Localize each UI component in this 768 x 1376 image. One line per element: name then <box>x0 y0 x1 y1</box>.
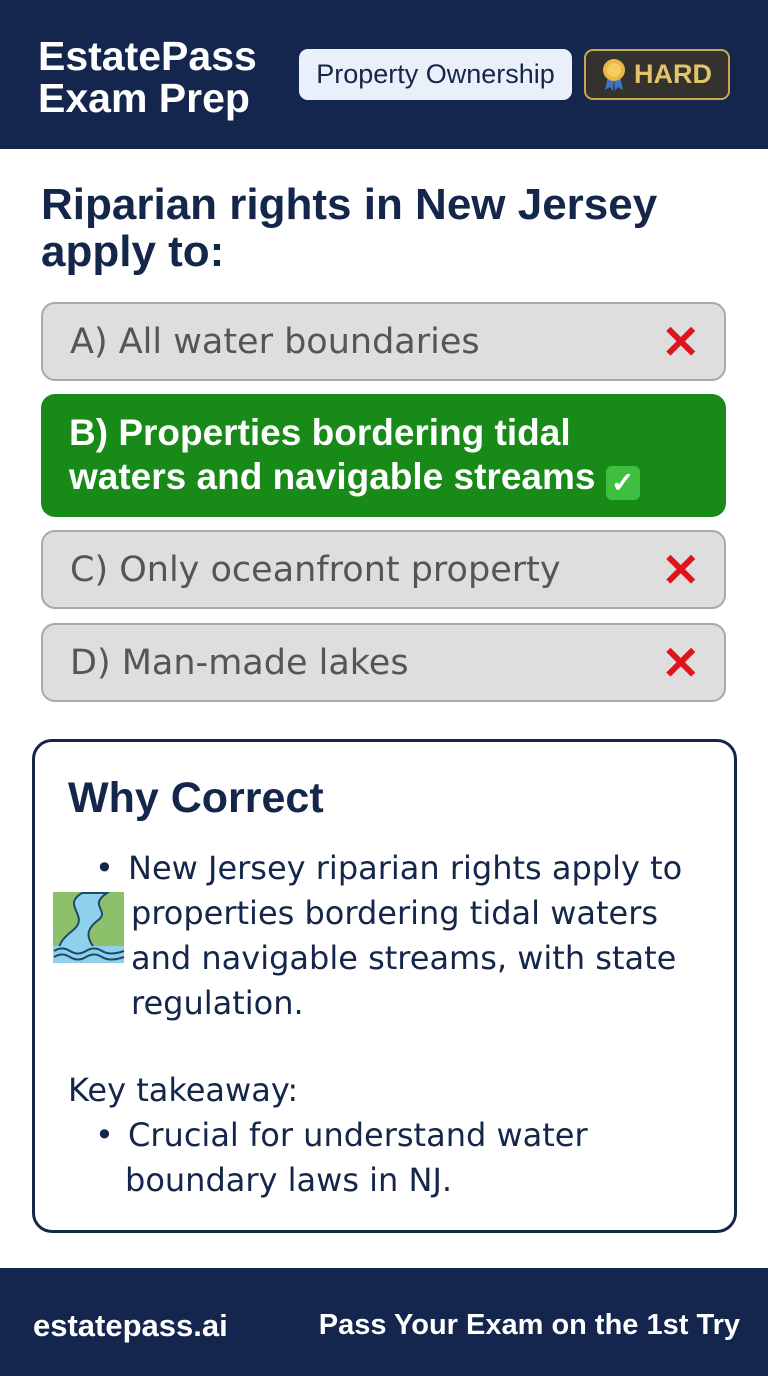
key takeaway <box>68 1071 588 1199</box>
footer <box>0 1268 768 1376</box>
explanation text: properties bordering tidal waters <box>131 894 658 932</box>
category pill <box>299 49 572 100</box>
question <box>41 180 657 276</box>
difficulty badge: HARD <box>634 59 712 89</box>
option B correct: ✓ <box>611 467 634 498</box>
option B correct: waters and navigable streams <box>69 456 595 497</box>
header <box>0 0 768 149</box>
option C: C) Only oceanfront property <box>70 550 561 590</box>
icon: river <box>53 892 124 963</box>
explanation panel <box>32 739 737 1233</box>
footer tagline: Pass Your Exam on the 1st Try <box>319 1309 740 1341</box>
question: Riparian rights in New Jersey <box>41 180 657 229</box>
option D <box>41 623 726 702</box>
option D: ✕ <box>661 636 700 688</box>
option A: A) All water boundaries <box>70 322 480 362</box>
question: apply to: <box>41 227 224 276</box>
option C: ✕ <box>661 544 700 596</box>
key takeaway: Key takeaway: <box>68 1071 298 1109</box>
option A: ✕ <box>661 316 700 368</box>
option D: D) Man-made lakes <box>70 642 409 682</box>
option B correct <box>41 394 726 517</box>
option A <box>41 302 726 381</box>
footer url: estatepass.ai <box>33 1308 228 1343</box>
key takeaway: • Crucial for understand water <box>95 1116 588 1154</box>
explanation text: • New Jersey riparian rights apply to <box>95 849 682 887</box>
panel heading: Why Correct <box>68 774 324 822</box>
explanation text: regulation. <box>131 984 304 1022</box>
brand title <box>38 33 257 121</box>
difficulty badge <box>584 49 730 100</box>
explanation text: and navigable streams, with state <box>131 939 676 977</box>
brand title: Exam Prep <box>38 75 250 121</box>
brand title: EstatePass <box>38 33 257 79</box>
category pill: Property Ownership <box>316 59 555 89</box>
icon: rosette <box>603 59 625 91</box>
key takeaway: boundary laws in NJ. <box>125 1161 452 1199</box>
explanation text <box>95 849 682 1022</box>
option B correct: B) Properties bordering tidal <box>69 412 571 453</box>
option C <box>41 530 726 609</box>
